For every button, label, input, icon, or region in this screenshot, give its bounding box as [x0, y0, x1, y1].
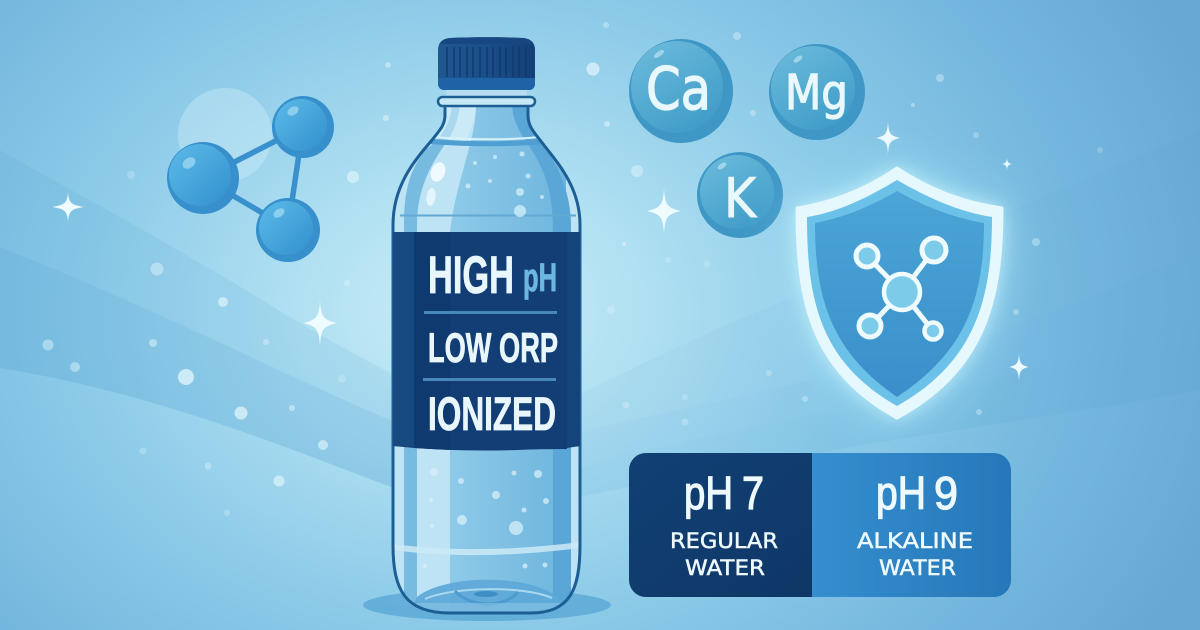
pH 7 text: REGULAR [670, 529, 778, 554]
bottle [390, 37, 585, 620]
shield [797, 168, 1002, 418]
panel: alkaline water [812, 453, 1011, 597]
label text: high pH: pH [523, 256, 557, 300]
mineral: calcium: Ca [646, 54, 711, 123]
pH 9 text: ALKALINE [857, 529, 973, 554]
mineral: magnesium [769, 44, 865, 140]
bottle cap [438, 37, 535, 90]
icon: left molecule [167, 88, 334, 262]
bottle neck [446, 89, 527, 98]
label text: low ORP: LOW ORP [428, 324, 558, 371]
label text: high pH: HIGH [428, 246, 514, 305]
pH 9 text: WATER [879, 556, 956, 581]
bottle outline [393, 106, 580, 613]
mineral: potassium: K [724, 167, 757, 230]
mineral: potassium [697, 152, 783, 238]
pH comparison panel [629, 453, 1011, 597]
icon: shield molecule [856, 238, 946, 340]
pH 9 text: 9 [934, 467, 958, 519]
label text: ionized: IONIZED [428, 387, 556, 440]
mineral: magnesium: Mg [785, 65, 848, 121]
pH 7 text: 7 [742, 467, 764, 519]
bottle body [390, 100, 585, 620]
mineral: calcium [629, 39, 733, 143]
neck ring [438, 97, 535, 106]
panel: regular water [629, 453, 812, 597]
pH 9 text: pH [876, 467, 926, 519]
pH 7 text [670, 467, 778, 581]
pH 9 text [857, 467, 973, 581]
bottle shadow [363, 589, 611, 621]
pH 7 text: WATER [685, 556, 765, 581]
background bubbles and dots [42, 22, 1103, 516]
pH 7 text: pH [684, 467, 733, 519]
sparkles [52, 122, 1029, 381]
bottle label [393, 232, 580, 450]
